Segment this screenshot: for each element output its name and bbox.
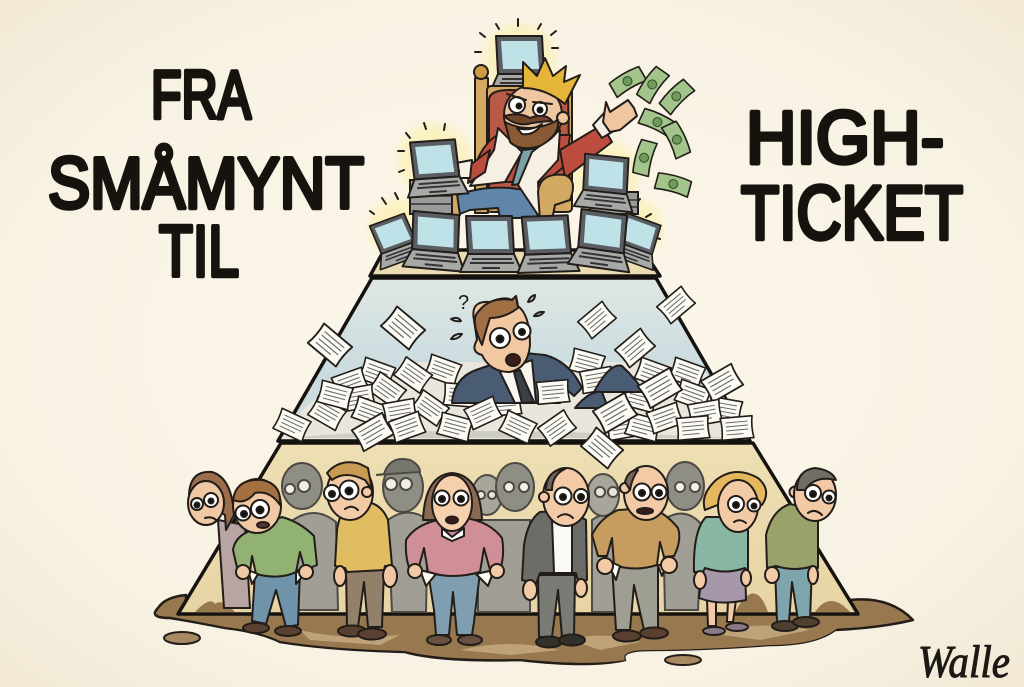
person: green shirt [233,479,317,636]
question mark: ? [458,292,469,314]
king raised arm [560,125,612,178]
person: teal woman [694,472,766,635]
paper pile [281,348,749,439]
king head [504,85,562,145]
background crowd [282,459,704,612]
throne back [474,65,572,213]
person: dark suit [522,468,589,648]
laptop behind throne [490,36,552,92]
throne arms [437,179,460,215]
person: olive man [765,468,836,631]
person: tan sweater [592,466,679,642]
title: right: TICKET [741,171,963,256]
title: left: SMÅMYNT [48,144,364,224]
mud inside bottom tier [172,594,858,663]
laptop glows and rays [364,18,668,262]
king legs [455,188,540,218]
title: left [48,57,364,292]
laptops [365,139,668,273]
pyramid: middle tier [278,278,750,441]
signature: Walle [918,636,1010,687]
businessman [451,295,644,408]
mud puddle [155,595,913,665]
papers in front of businessman [273,286,754,469]
title: right [741,96,963,256]
person: yellow shirt [324,462,397,640]
pyramid: bottom tier [178,443,858,614]
title: left: TIL [159,212,239,292]
crown [523,58,580,104]
king robe [470,134,570,182]
person: woman, far left [188,472,250,608]
pyramid: top tier [370,250,660,276]
person: pink woman [406,473,504,645]
money [609,65,695,197]
king resting arm [468,150,490,183]
title: left: FRA [151,57,251,133]
throne and king [437,58,637,220]
title: right: HIGH- [746,96,944,179]
